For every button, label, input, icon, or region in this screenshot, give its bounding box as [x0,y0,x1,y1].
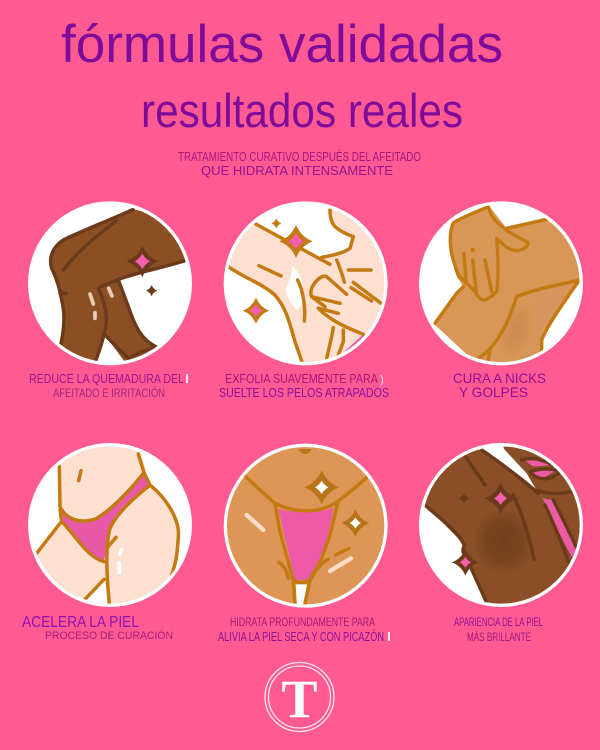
caption: healing: ACELERA LA PIEL [22,614,139,631]
caption: nicks and bumps: Y GOLPES [459,384,528,400]
caption: brighter skin: MÁS BRILLANTE [467,629,531,644]
caption: exfoliate: EXFOLIA SUAVEMENTE PARA [225,371,378,386]
caption: hydrates: HIDRATA PROFUNDAMENTE PARA [230,615,375,629]
title: resultados reales [141,84,463,137]
subtitle: QUE HIDRATA INTENSAMENTE [201,163,393,178]
panel: razor burn [28,201,200,400]
caption: exfoliate: SUELTE LOS PELOS ATRAPADOS [219,386,389,400]
caption: healing: PROCESO DE CURACIÓN [45,629,173,642]
subtitle: TRATAMIENTO CURATIVO DESPUÉS DEL AFEITADO [178,149,421,164]
panel: exfoliate [220,201,388,397]
caption: brighter skin [454,615,543,644]
panel: nicks and bumps [419,201,593,400]
icon: hand on thigh [419,201,593,367]
icon: bikini area with sparkles [224,444,388,608]
panel: hydrates [215,435,395,644]
subtitle [178,149,421,178]
caption: brighter skin: APARIENCIA DE LA PIEL [454,615,543,629]
panel: brighter skin [417,440,593,644]
caption: razor burn: REDUCE LA QUEMADURA DEL [29,371,184,386]
icon: arm and hand applying cream [224,201,388,366]
caption: exfoliate [219,371,389,400]
icon: hips with pink underwear [20,440,192,610]
logo: T in double ring [265,662,334,732]
caption: razor burn [29,371,188,400]
title: fórmulas validadas [61,15,503,74]
logo: T in double ring: T [281,669,318,729]
icon: brown knee [28,201,200,367]
title [61,15,503,137]
caption: healing [22,614,173,642]
icon: dark skin underarm [417,440,593,607]
caption: nicks and bumps [453,370,546,400]
caption: razor burn: AFEITADO E IRRITACIÓN [53,385,165,400]
caption: nicks and bumps: CURA A NICKS [453,370,546,386]
caption: hydrates [218,615,390,644]
caption: hydrates: ALIVIA LA PIEL SECA Y CON PICAZÓN [218,629,384,644]
caption: exfoliate: ) [380,374,384,386]
panel: healing [20,440,192,642]
